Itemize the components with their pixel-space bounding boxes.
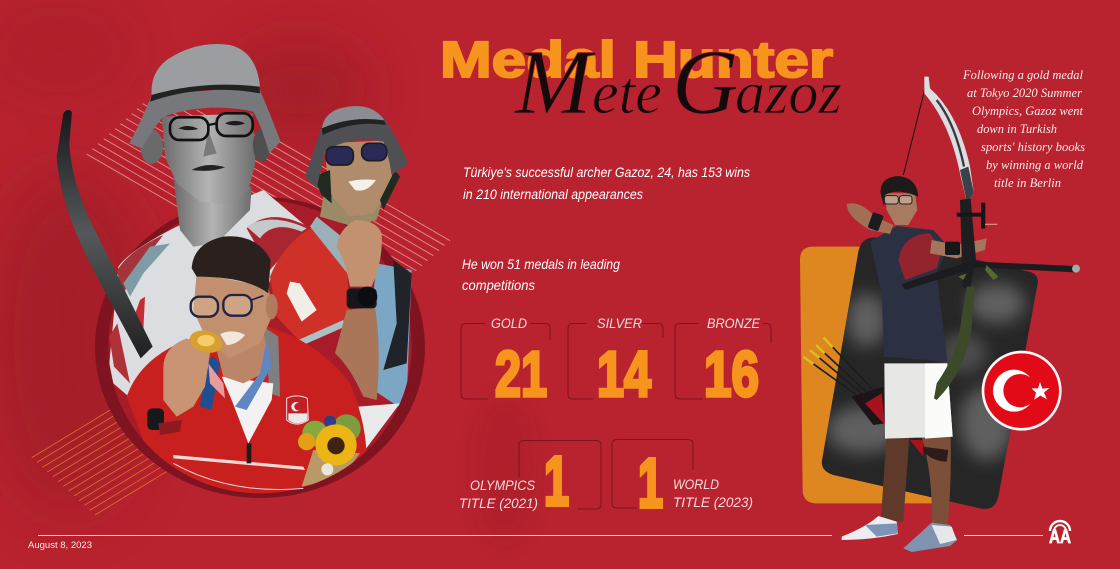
Turkish flag badge [982,351,1062,431]
title: Medal Hunter [440,31,833,88]
bowstring [903,88,925,175]
side note [962,67,1085,190]
stat: silver medals [568,316,663,410]
person: black and white portrait [109,44,308,403]
panel: archer with backdrop [800,77,1080,552]
side note: by winning a world [986,157,1083,172]
stat: gold medals [461,316,550,410]
dark ring behind photos [95,197,425,498]
script subtitle: azoz [735,60,842,126]
side note: sports' history books [981,139,1085,154]
icon: agency logo [1049,521,1071,548]
icon: agency logo: AA [1049,527,1071,548]
stat: world title: 1 [638,444,663,522]
side note: Following a gold medal [962,67,1083,82]
side note: at Tokyo 2020 Summer [967,85,1083,100]
person: gold medal portrait [127,236,367,497]
intro text: in 210 international appearances [463,186,643,202]
stat: silver medals: 14 [597,338,651,410]
medals text [462,256,620,293]
stat: bronze medals [675,316,771,410]
script subtitle: M [513,31,596,133]
stat: Olympics title [459,440,601,520]
stat: gold medals: 21 [495,338,547,410]
arrows and quiver [803,337,923,457]
recurve bow [902,77,1080,400]
recurve bow limb [57,110,153,358]
bouquet with sunflower [298,414,361,487]
intro text: Türkiye's successful archer Gazoz, 24, has 153 wins [463,164,750,180]
script subtitle: G [672,31,738,133]
stat: bronze medals: 16 [704,338,759,410]
stat: world title: TITLE (2023) [673,495,753,510]
stat: silver medals: SILVER [597,316,642,331]
white diagonal hatch lines [87,99,450,276]
medals text: competitions [462,277,535,293]
side note: Olympics, Gazoz went [972,103,1083,118]
intro text [463,164,750,202]
orange card [800,247,933,503]
side note: title in Berlin [994,175,1061,190]
medals text: He won 51 medals in leading [462,256,620,272]
side note: down in Turkish [977,121,1057,136]
stat: bronze medals: BRONZE [707,316,761,331]
stat: Olympics title: OLYMPICS [470,478,535,493]
stat: world title: WORLD [673,477,719,492]
stat: Olympics title: 1 [544,442,569,520]
stat: Olympics title: TITLE (2021) [459,496,538,511]
footer date: August 8, 2023 [28,540,92,551]
orange diagonal hatch lines [32,391,205,515]
panel: athlete photo collage [32,44,450,515]
athlete figure [842,176,987,552]
dark smoky card [822,237,1038,509]
stat: world title [612,440,753,522]
person: smiling portrait [270,106,412,450]
script subtitle: ete [592,60,662,126]
stat: gold medals: GOLD [491,316,527,331]
